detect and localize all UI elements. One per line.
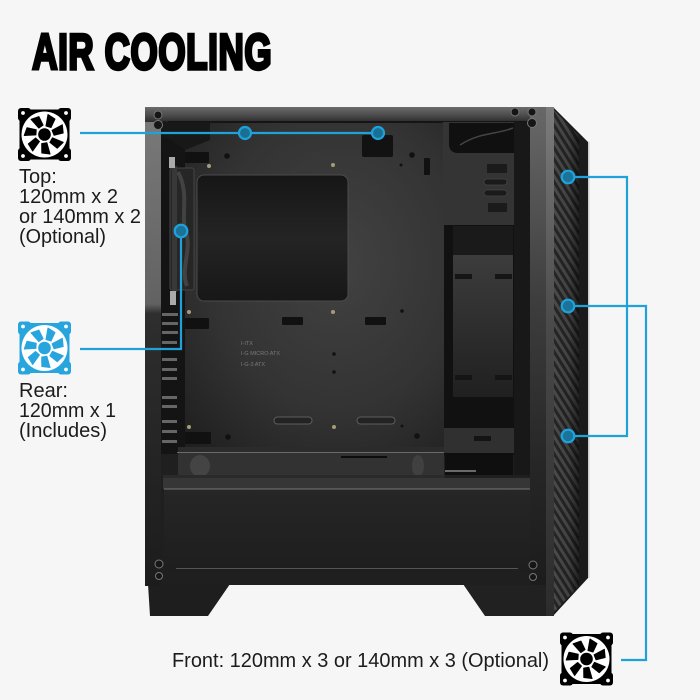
marker: front fan 2 (562, 300, 574, 312)
standoffs (187, 163, 336, 429)
motherboard size labels: I-G MICRO ATX (241, 351, 280, 357)
text: top fan specification: (Optional) (19, 226, 106, 248)
text: top fan specification (19, 166, 141, 248)
left interior shadow (161, 122, 185, 454)
case body (146, 107, 554, 585)
marker: front fan 1 (562, 171, 574, 183)
motherboard size labels: I-ITX (241, 341, 253, 347)
text: rear fan specification (19, 380, 116, 442)
icon: front fan (560, 632, 613, 686)
motherboard size labels (241, 341, 280, 368)
text: rear fan specification: (Includes) (19, 420, 107, 442)
left expansion slots (162, 313, 178, 443)
marker: top fan 1 (239, 127, 251, 139)
top bar (145, 107, 553, 122)
PSU shroud front (164, 489, 530, 570)
text: rear fan specification: Rear: (19, 380, 68, 402)
drive bay cable (460, 128, 513, 145)
title: AIR COOLING (32, 25, 272, 81)
CPU cutout (197, 175, 348, 301)
text: rear fan specification: 120mm x 1 (19, 400, 116, 422)
drive bay upper plate (443, 122, 515, 225)
icon: rear fan (18, 322, 71, 374)
right front pillar (530, 107, 546, 585)
callout lines: top (80, 127, 384, 139)
marker: front fan 3 (562, 430, 574, 442)
case feet (148, 584, 553, 616)
icon: top fan (18, 108, 71, 161)
drive bay small openings (487, 164, 507, 212)
drive cage (444, 225, 514, 475)
callout lines: rear (80, 225, 187, 349)
marker: rear fan (175, 225, 187, 237)
tray mounting details (185, 152, 430, 444)
motherboard tray (163, 122, 444, 454)
top left corner bracket (163, 121, 210, 150)
marker: top fan 2 (372, 127, 384, 139)
screws (154, 108, 537, 580)
text: top fan specification: or 140mm x 2 (19, 206, 141, 228)
computer case (145, 107, 590, 616)
grommet slots (274, 417, 395, 424)
shroud top (163, 447, 530, 489)
case side mesh panel (553, 107, 590, 616)
shroud edge lines (164, 488, 530, 569)
drive bay slots (484, 179, 507, 196)
top cutout (362, 135, 393, 157)
drive bay cable cutout (449, 123, 520, 153)
text: top fan specification: Top: (19, 166, 57, 188)
text: top fan specification: 120mm x 2 (19, 186, 118, 208)
callout lines: front (562, 171, 646, 660)
front edge highlight (546, 107, 554, 616)
right interior column (514, 122, 530, 475)
left pillar (145, 108, 161, 586)
motherboard size labels: I-G-3 ATX (241, 362, 265, 368)
text: front fan specification: Front: 120mm x 3 or 140mm x 3 (Optional) (172, 650, 549, 672)
rear fan in case (169, 157, 194, 305)
